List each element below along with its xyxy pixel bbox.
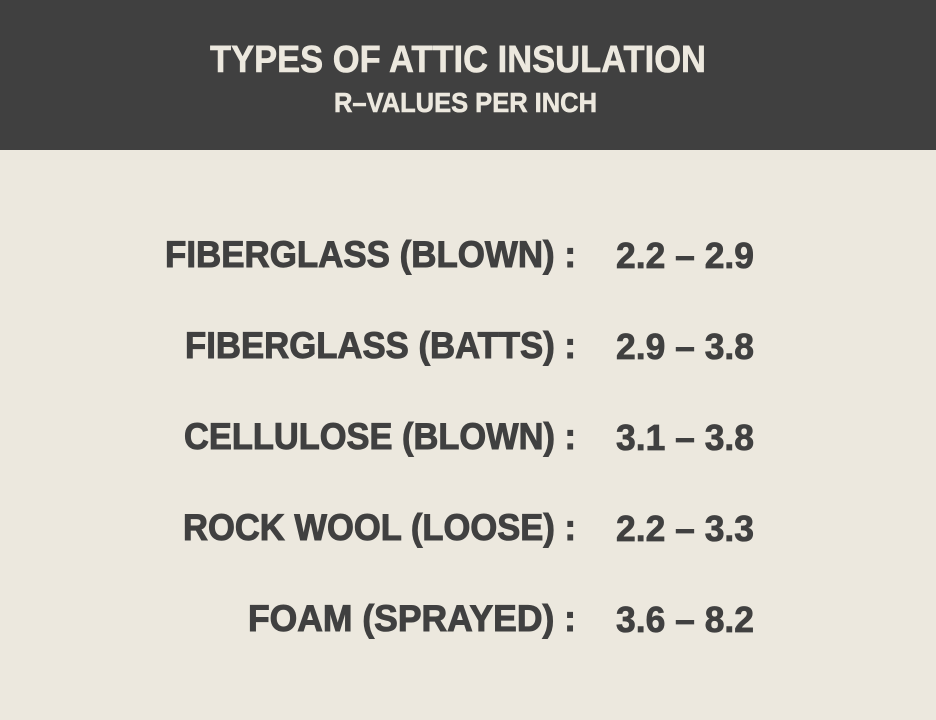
header band bbox=[0, 0, 936, 150]
row: foam sprayed: FOAM (SPRAYED) : bbox=[248, 598, 576, 639]
row: rock wool loose: ROCK WOOL (LOOSE) : bbox=[183, 507, 576, 548]
row: foam sprayed bbox=[248, 598, 754, 640]
row: fiberglass batts: FIBERGLASS (BATTS) : bbox=[185, 325, 576, 366]
row: rock wool loose: 2.2 – 3.3 bbox=[616, 508, 754, 549]
row: fiberglass blown: FIBERGLASS (BLOWN) : bbox=[165, 234, 576, 275]
title: TYPES OF ATTIC INSULATION bbox=[210, 39, 706, 81]
subtitle: R–VALUES PER INCH bbox=[334, 87, 597, 118]
row: fiberglass batts: 2.9 – 3.8 bbox=[616, 326, 754, 367]
row: foam sprayed: 3.6 – 8.2 bbox=[616, 599, 754, 640]
row: cellulose blown: CELLULOSE (BLOWN) : bbox=[184, 416, 576, 457]
row: cellulose blown: 3.1 – 3.8 bbox=[616, 417, 754, 458]
row: fiberglass blown: 2.2 – 2.9 bbox=[616, 235, 754, 276]
